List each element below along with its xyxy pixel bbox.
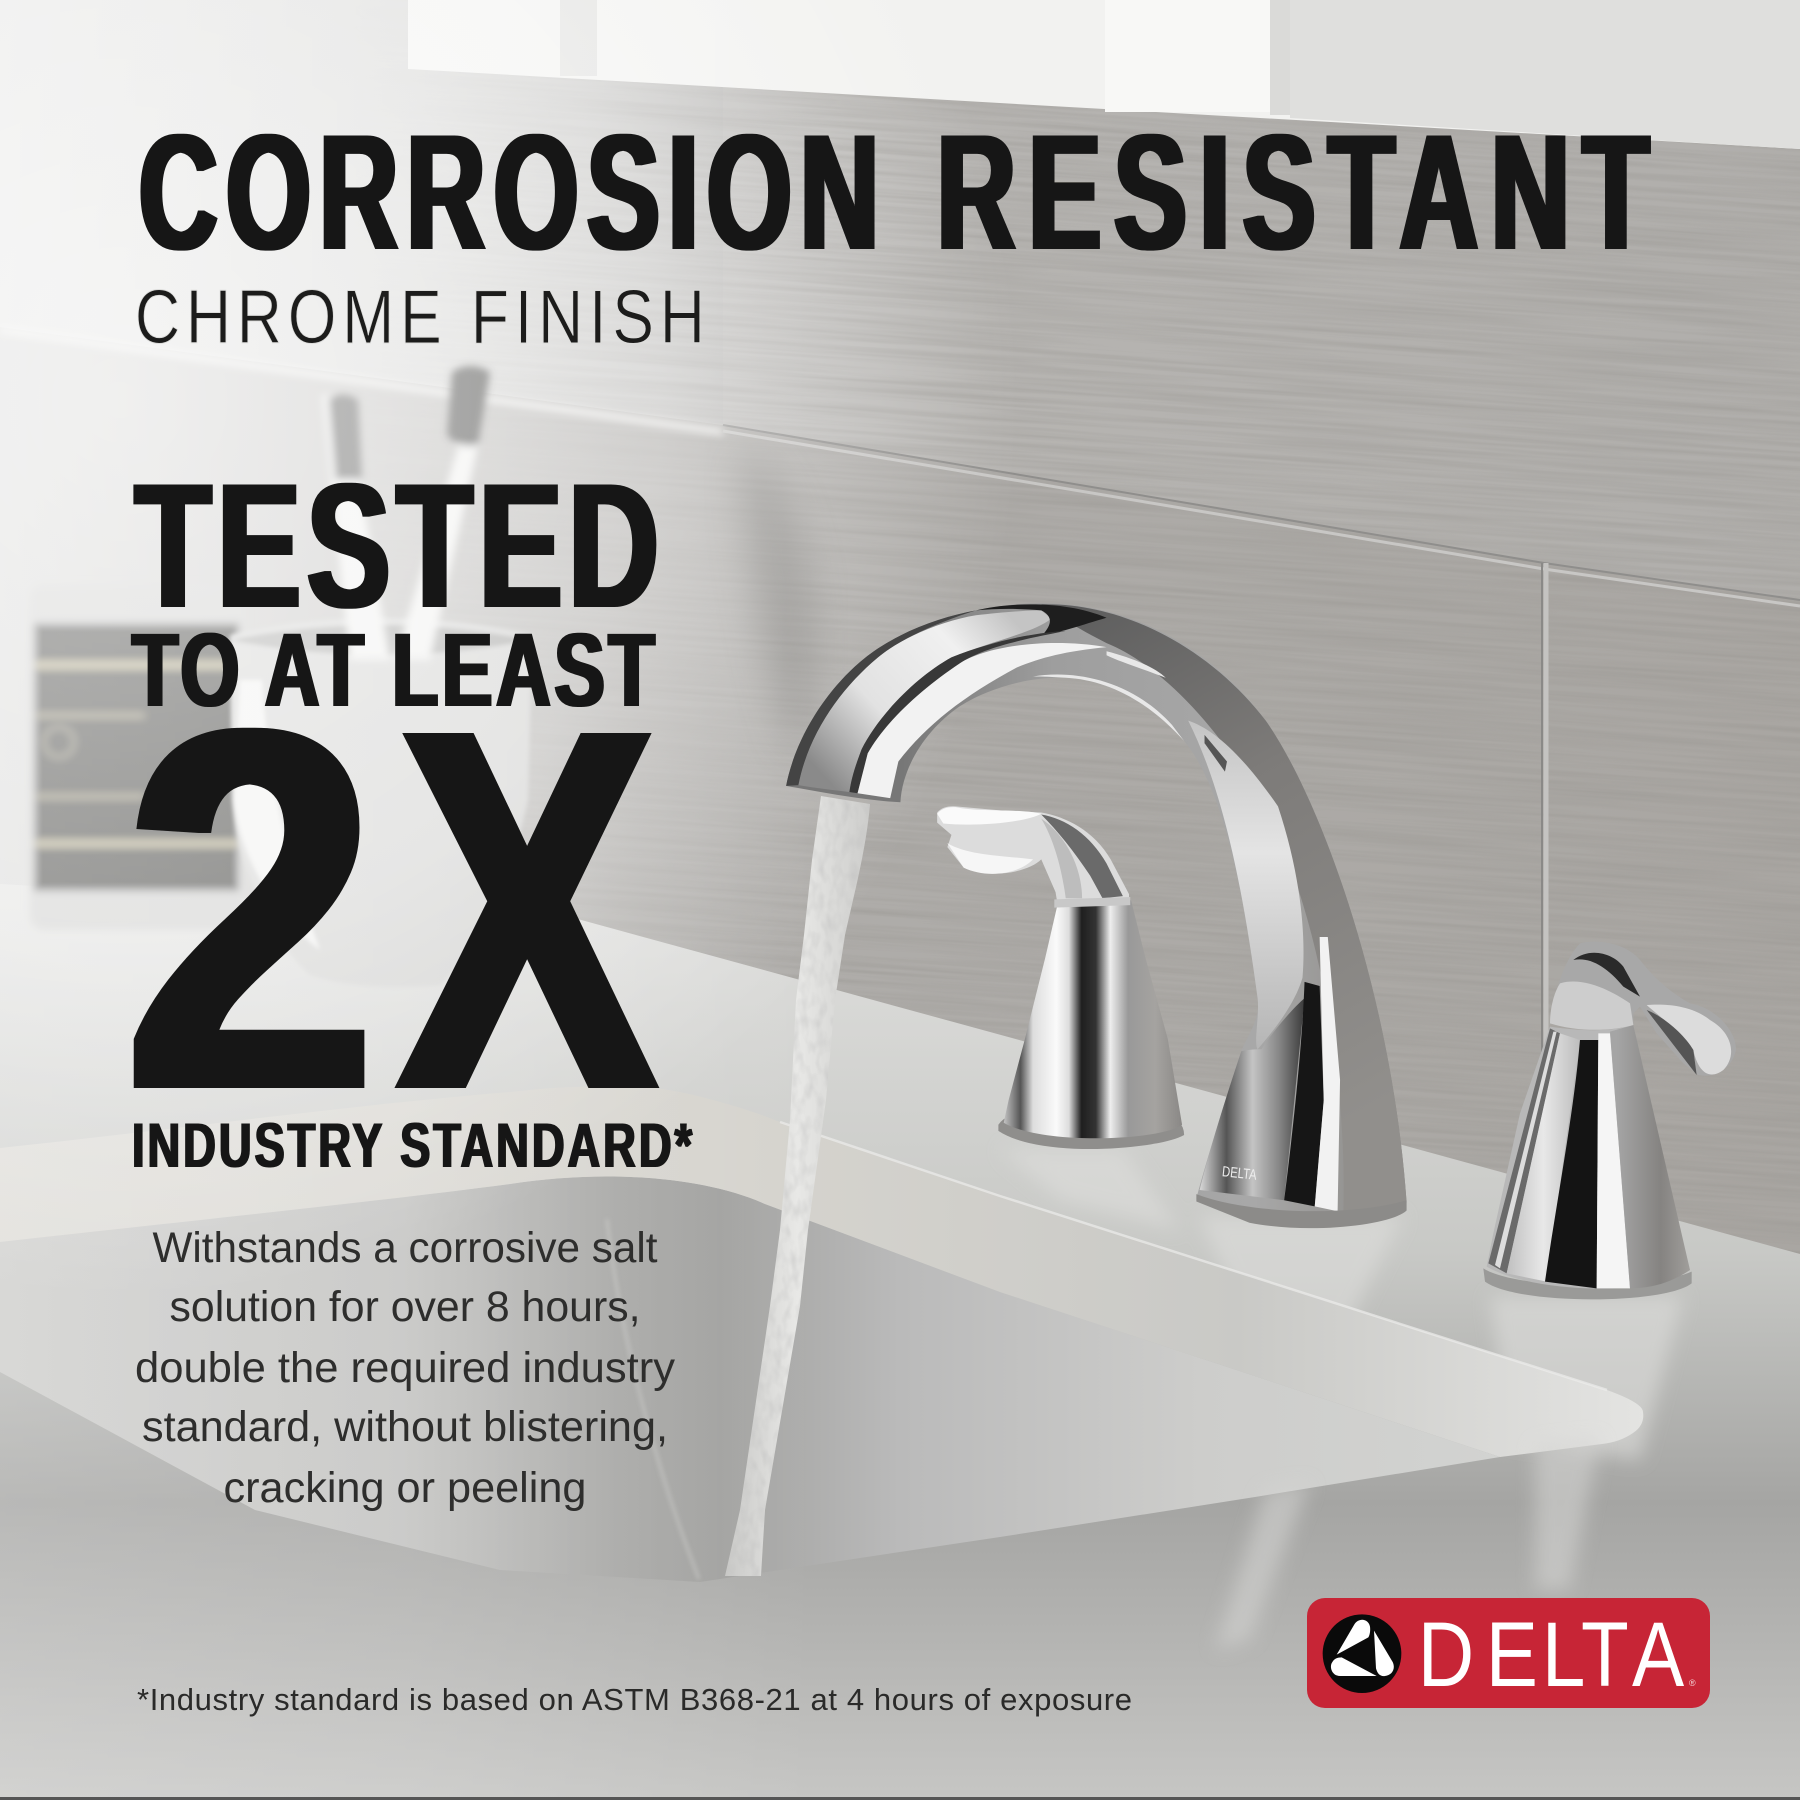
basin corner line — [607, 1219, 699, 1579]
spout gasket — [1196, 1194, 1407, 1228]
spout top dark wedge — [976, 604, 1107, 634]
faucet — [786, 603, 1736, 1299]
spout leg highlight — [1188, 721, 1304, 1049]
right handle dome — [1550, 941, 1736, 1076]
body text: solution for over 8 hours, — [170, 1283, 640, 1331]
left handle — [937, 806, 1184, 1149]
body text: Withstands a corrosive salt — [152, 1224, 658, 1272]
headline line: industry standard: INDUSTRY STANDARD* — [132, 1110, 693, 1181]
headline: tested to at least 2x industry standard — [124, 446, 693, 1197]
footnote: *Industry standard is based on ASTM B368-21 at 4 hours of exposure — [137, 1682, 1132, 1717]
spout white stripe — [1315, 937, 1340, 1211]
sink basin — [0, 1176, 1500, 1582]
title: corrosion resistant — [139, 99, 1649, 284]
delta logo — [1307, 1598, 1710, 1708]
left handle gasket — [998, 1117, 1184, 1149]
blurred candle glass — [30, 585, 245, 930]
spout dark inner band — [849, 631, 1066, 793]
headline word: tested: TESTED — [135, 446, 659, 645]
body text: double the required industry — [135, 1344, 675, 1392]
spout white inner band — [858, 643, 1107, 798]
vanity counter top — [0, 884, 1800, 1800]
bottom edge line — [0, 1797, 1800, 1800]
light fade behind text — [0, 0, 820, 1800]
spout outer band — [1041, 604, 1407, 1213]
rim edge highlight — [780, 1122, 1607, 1390]
right handle gasket — [1483, 1268, 1692, 1299]
blurred white cup — [230, 618, 532, 987]
body text: standard, without blistering, — [142, 1403, 668, 1451]
spout arm highlight — [798, 610, 1051, 792]
blurred toothbrushes — [322, 366, 490, 660]
front counter highlights — [1215, 1438, 1600, 1650]
spout base left — [1200, 998, 1305, 1200]
spout outer dark edge — [786, 610, 976, 786]
right handle lever — [1647, 1005, 1731, 1074]
right handle — [1483, 941, 1736, 1299]
sink rim — [0, 1086, 1643, 1457]
headline number: 2x: X — [397, 621, 659, 1197]
spout black stripe — [1284, 982, 1324, 1206]
title: corrosion resistant: CORROSION — [139, 99, 879, 284]
right handle cone — [1487, 1025, 1690, 1288]
title: corrosion resistant: RESISTANT — [937, 99, 1649, 284]
headline number: 2x: 2 — [124, 621, 377, 1197]
spout hole reflection — [1205, 735, 1227, 772]
body text: cracking or peeling — [224, 1464, 586, 1512]
subtitle: chrome finish: CHROME FINISH — [135, 274, 705, 359]
headline line: to at least: TO AT LEAST — [132, 612, 655, 729]
registered mark: ® — [1689, 1678, 1696, 1688]
headline number: 2x — [124, 621, 659, 1197]
spout arch reflections — [1033, 651, 1184, 741]
top-left haze — [0, 0, 1100, 1300]
mirror at top of wall — [408, 0, 1800, 149]
counter reflections under handles — [1000, 1149, 1683, 1460]
water stream — [725, 796, 870, 1576]
faucet logo mark: DELTA — [1221, 1164, 1258, 1184]
body text — [135, 1224, 675, 1512]
wall tiles — [0, 0, 1800, 1254]
icon: delta triangle mark — [1323, 1614, 1401, 1693]
spout body — [786, 603, 1407, 1226]
wall shadow of faucet — [740, 450, 812, 760]
main spout — [786, 603, 1407, 1228]
wordmark: DELTA — [1418, 1604, 1684, 1706]
